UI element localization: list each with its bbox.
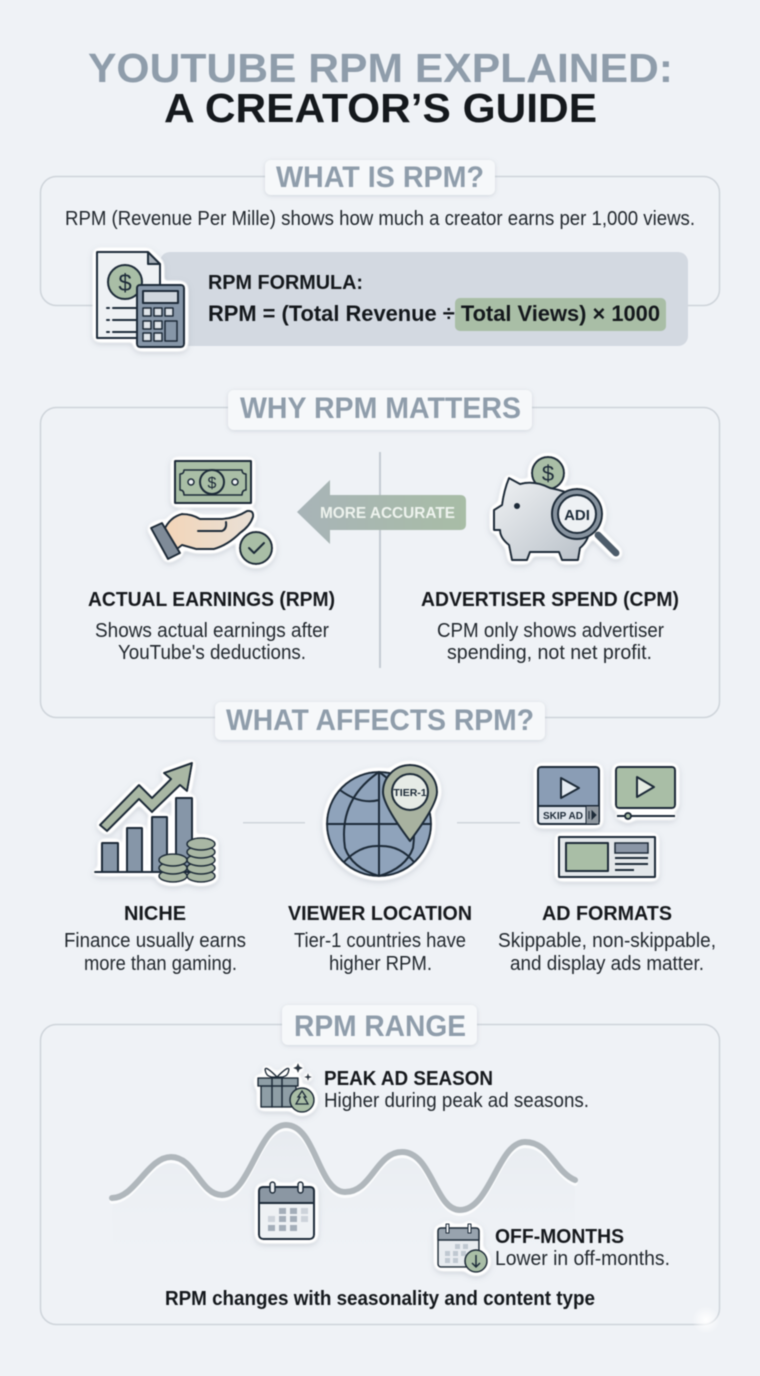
center divider: [379, 452, 381, 668]
icon: piggy bank with magnifier: [494, 457, 616, 560]
heading: what is RPM: WHAT IS RPM?: [276, 161, 484, 194]
off-months label: OFF-MONTHS: [495, 1226, 624, 1248]
column: niche: Finance usually earns: [64, 930, 246, 952]
peak ad season label: [324, 1068, 589, 1112]
column: ad formats: [498, 903, 716, 975]
formula box: RPM = (Total Revenue ÷ Total Views) × 1000: [208, 301, 660, 326]
column: advertiser spend: spending, not net profit.: [447, 642, 652, 664]
icon: ad formats: SKIP AD: [543, 811, 583, 822]
formula box: RPM FORMULA:: [208, 272, 363, 294]
icon: piggy bank with magnifier: ADI: [564, 507, 590, 524]
icon: hand with cash: [151, 461, 272, 564]
arrow: more accurate: [297, 480, 466, 544]
column: viewer location: [288, 903, 472, 975]
column: viewer location: VIEWER LOCATION: [288, 903, 472, 925]
column: ad formats: AD FORMATS: [542, 903, 672, 925]
panel: why RPM matters: [40, 390, 720, 718]
column: actual earnings: [88, 589, 335, 664]
icon: gift and ornament: [258, 1063, 314, 1112]
column: niche: NICHE: [124, 903, 186, 925]
seasonality wave line: [112, 1125, 575, 1265]
column: viewer location: Tier-1 countries have: [294, 930, 466, 952]
icon: piggy bank with magnifier: $: [542, 461, 554, 486]
heading: RPM range: RPM RANGE: [294, 1010, 466, 1043]
column: actual earnings: ACTUAL EARNINGS (RPM): [88, 589, 335, 611]
peak ad season label: PEAK AD SEASON: [324, 1068, 493, 1090]
icon: calendar: [259, 1182, 314, 1239]
off-months label: Lower in off-months.: [495, 1248, 670, 1270]
column: viewer location: higher RPM.: [329, 953, 432, 975]
icon: off-months calendar: [438, 1224, 487, 1272]
heading: why RPM matters: WHY RPM MATTERS: [240, 392, 521, 425]
icon: document and calculator: $: [118, 270, 132, 297]
column: actual earnings: YouTube's deductions.: [118, 642, 306, 664]
panel: RPM range: [40, 1005, 720, 1324]
icon: hand with cash: $: [208, 475, 217, 492]
formula box: [160, 252, 688, 346]
peak ad season label: Higher during peak ad seasons.: [324, 1090, 589, 1112]
icon: growth chart with coins: [95, 763, 215, 882]
panel: what is RPM: [40, 160, 720, 347]
column: niche: [64, 903, 246, 975]
column: niche: more than gaming.: [84, 953, 237, 975]
icon: ad formats: [538, 767, 675, 877]
definition text: RPM (Revenue Per Mille) shows how much a creator earns per 1,000 views.: [65, 208, 695, 230]
arrow: more accurate: MORE ACCURATE: [320, 505, 455, 522]
icon: document and calculator: [97, 252, 184, 347]
column: advertiser spend: CPM only shows advertiser: [437, 620, 664, 642]
off-months label: [495, 1226, 670, 1270]
icon: globe with tier-1 pin: [327, 765, 437, 876]
column: advertiser spend: [421, 589, 679, 664]
title: [88, 45, 673, 131]
footer note: RPM changes with seasonality and content type: [165, 1288, 595, 1310]
column: advertiser spend: ADVERTISER SPEND (CPM): [421, 589, 679, 611]
icon: globe with tier-1 pin: TIER-1: [393, 787, 427, 799]
title: YOUTUBE RPM EXPLAINED:: [88, 45, 673, 91]
column: actual earnings: Shows actual earnings after: [95, 620, 329, 642]
column: ad formats: and display ads matter.: [510, 953, 704, 975]
title: A CREATOR’S GUIDE: [164, 85, 597, 131]
column: ad formats: Skippable, non-skippable,: [498, 930, 716, 952]
heading: what affects RPM: WHAT AFFECTS RPM?: [226, 704, 534, 737]
